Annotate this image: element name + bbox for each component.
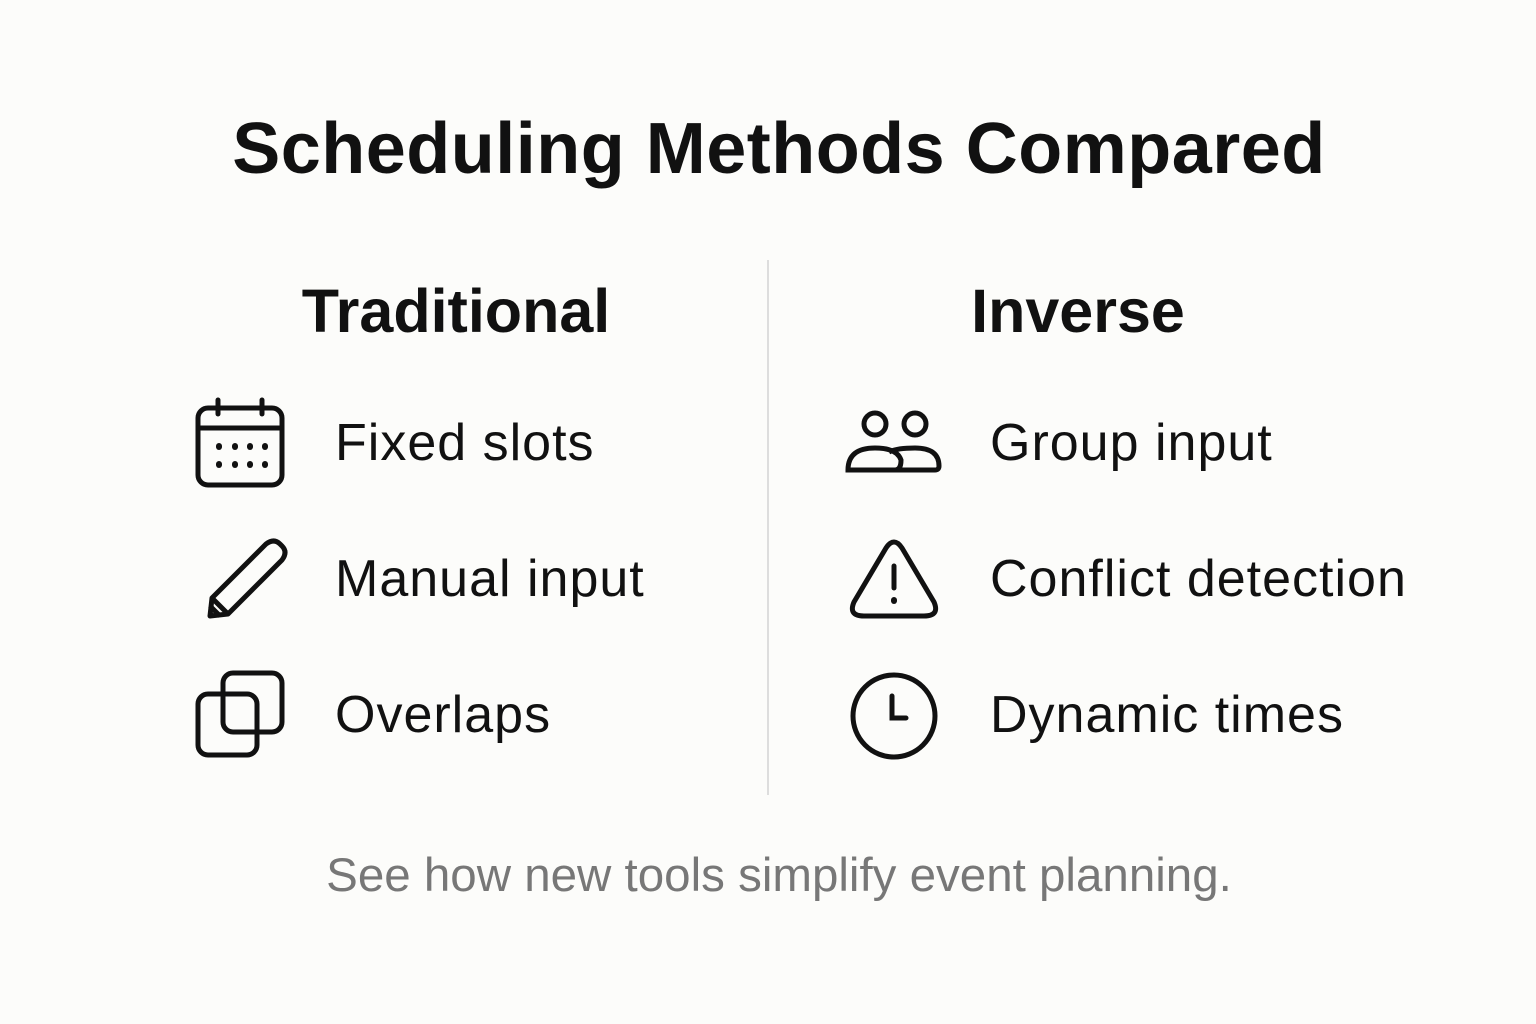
panel: inverse [846,410,1407,760]
title: Scheduling Methods Compared [232,109,1326,189]
icon: group [846,410,942,472]
text: dynamic times: Dynamic times [990,686,1344,744]
divider [767,260,769,795]
text: overlaps: Overlaps [335,686,551,744]
icon: overlaps [196,670,284,758]
footer text: See how new tools simplify event planning. [326,849,1232,902]
icon: pencil [208,538,288,618]
heading: inverse: Inverse [971,277,1185,345]
text: conflict detection: Conflict detection [990,550,1407,608]
text: manual input: Manual input [335,550,645,608]
icon: warning [850,540,938,618]
icon: calendar [196,398,284,488]
text: group input: Group input [990,414,1273,472]
text: fixed slots: Fixed slots [335,414,595,472]
icon: clock [850,672,938,760]
panel: traditional [196,398,645,758]
heading: traditional: Traditional [302,277,610,345]
